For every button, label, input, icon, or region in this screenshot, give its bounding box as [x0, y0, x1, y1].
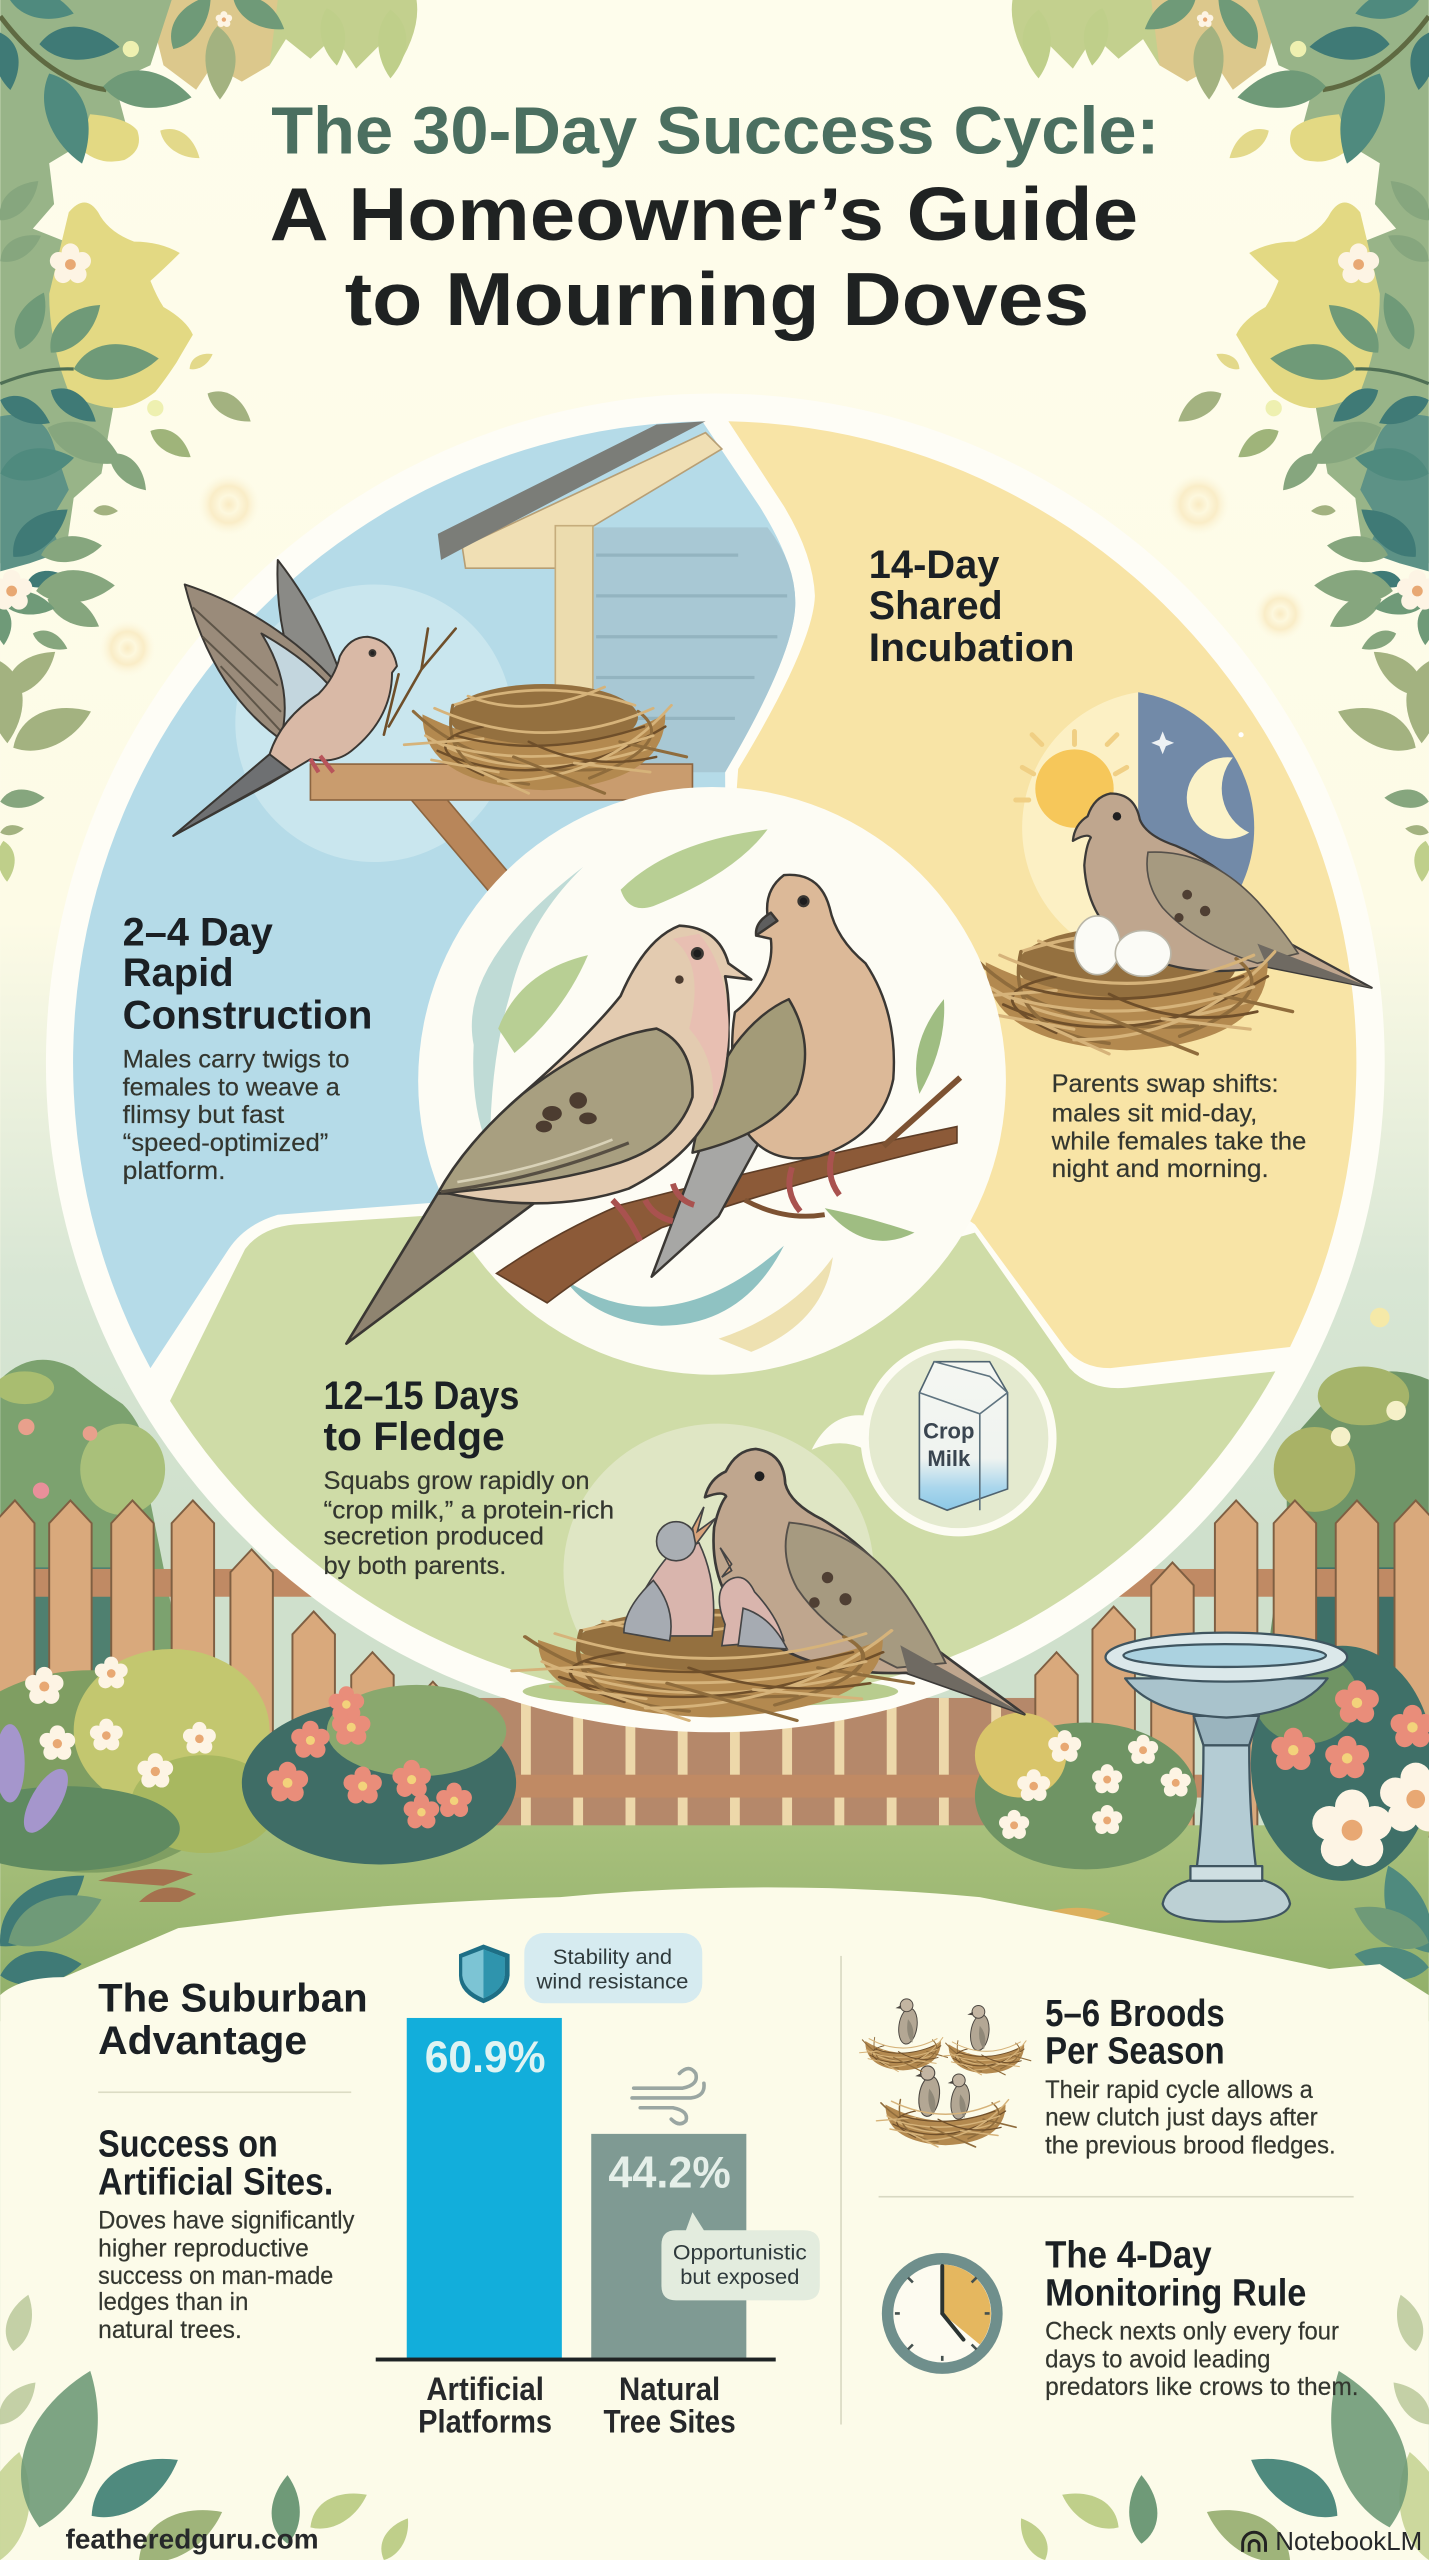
callout: opportunistic: but exposed [680, 2266, 799, 2289]
section: suburban advantage text: success on man-made [98, 2262, 333, 2290]
chick [624, 1507, 787, 1649]
panel: rapid construction [73, 421, 795, 1368]
feeding scene [512, 1424, 1056, 1720]
body text: platform. [123, 1157, 226, 1185]
panel: shared incubation: Incubation [869, 626, 1074, 670]
bar: artificial platforms [407, 2018, 562, 2359]
section: suburban advantage text: Doves have significantly [98, 2207, 355, 2235]
panel: days to fledge [170, 1211, 1275, 1720]
axis labels: Artificial [426, 2370, 544, 2407]
body text: Parents swap shifts: [1052, 1070, 1279, 1098]
crop milk callout: Crop [923, 1418, 974, 1443]
body text: females to weave a [123, 1074, 341, 1102]
bushes [0, 1646, 1429, 1990]
foreground plants [0, 1856, 97, 1961]
body text: Squabs grow rapidly on [323, 1467, 590, 1495]
stat: broods per season: 5–6 Broods [1045, 1992, 1225, 2034]
title: A Homeowner’s Guide [270, 172, 1138, 256]
flying dove [173, 560, 397, 836]
stat: broods per season: Per Season [1045, 2030, 1225, 2072]
white ring of cycle diagram [46, 393, 1385, 1732]
incubating dove on nest [965, 793, 1372, 1054]
body text: “speed-optimized” [123, 1129, 328, 1157]
panel: rapid construction: Rapid [123, 951, 234, 995]
stat: monitoring rule: predators like crows to them. [1045, 2373, 1359, 2401]
bar: natural tree sites: 44.2% [608, 2149, 731, 2198]
title [270, 93, 1159, 341]
body text [123, 1046, 350, 1185]
garden scene [0, 1308, 1429, 2021]
body text [1051, 1070, 1306, 1183]
stat: broods per season [860, 1992, 1336, 2159]
bar chart [376, 1933, 820, 2440]
body text: “crop milk,” a protein-rich [323, 1496, 614, 1524]
crop milk callout: Milk [927, 1446, 971, 1471]
lawn [0, 1825, 1429, 2021]
footer: NotebookLM mark: NotebookLM [1275, 2526, 1422, 2556]
central medallion [346, 787, 1006, 1375]
foliage: top left [0, 0, 417, 882]
stat: monitoring rule [882, 2234, 1359, 2401]
axis labels: Tree Sites [603, 2403, 736, 2440]
nest [404, 684, 687, 793]
bar: natural tree sites [591, 2134, 746, 2359]
footer: website: featheredguru.com [66, 2524, 319, 2555]
body text: Males carry twigs to [123, 1046, 350, 1074]
panel: days to fledge: to Fledge [323, 1415, 505, 1459]
foliage: top right [1012, 0, 1429, 882]
front dove [346, 926, 751, 1344]
title: The 30-Day Success Cycle: [271, 93, 1159, 168]
stat: broods per season: the previous brood fledges. [1045, 2131, 1336, 2159]
section: suburban advantage text: Advantage [98, 2019, 307, 2063]
bar: artificial platforms: 60.9% [425, 2033, 546, 2082]
heading: 14-Day [869, 543, 1000, 587]
body text: by both parents. [323, 1552, 506, 1580]
section: suburban advantage text: higher reproductive [98, 2234, 309, 2262]
stat: broods per season: new clutch just days after [1045, 2104, 1318, 2132]
body text [323, 1467, 614, 1580]
illustration: porch ledge and dove [173, 421, 795, 895]
callout: stability [524, 1933, 702, 2003]
stat: broods per season: Their rapid cycle allows a [1045, 2076, 1314, 2104]
bottom panel background [0, 1887, 1429, 2560]
day and night circle [1016, 692, 1254, 963]
icon: wind [632, 2069, 704, 2124]
title: to Mourning Doves [345, 257, 1089, 341]
stat: monitoring rule: The 4-Day [1045, 2234, 1212, 2276]
section: suburban advantage text: Success on [98, 2123, 278, 2165]
fence [0, 1500, 1429, 1837]
icon: shield [459, 1944, 510, 2003]
body text: males sit mid-day, [1052, 1100, 1257, 1128]
panel: shared incubation [719, 421, 1372, 1368]
section: suburban advantage text: The Suburban [98, 1976, 368, 2020]
panel: shared incubation: Shared [869, 584, 1003, 628]
foliage: bottom right [1014, 2291, 1429, 2560]
body text: night and morning. [1052, 1155, 1269, 1183]
icon: clock [882, 2253, 1003, 2374]
body text: flimsy but fast [123, 1101, 284, 1129]
decorative swirls [472, 829, 944, 1352]
birdbath [1106, 1633, 1347, 1922]
axis labels [418, 2370, 736, 2440]
icon: three nests [860, 1999, 1031, 2147]
body text: while females take the [1051, 1127, 1306, 1155]
stat: monitoring rule: Check nexts only every four [1045, 2318, 1339, 2346]
callout: stability: Stability and [553, 1946, 672, 1969]
heading: 12–15 Days [323, 1374, 519, 1418]
faint background flowers [100, 473, 1306, 2516]
callout: opportunistic: Opportunistic [673, 2242, 807, 2265]
axis labels: Platforms [418, 2403, 552, 2440]
section: suburban advantage text: ledges than in [98, 2288, 248, 2316]
heading: 2–4 Day [123, 910, 274, 954]
panel: rapid construction: Construction [123, 994, 372, 1038]
crop milk callout [812, 1340, 1057, 1536]
axis labels: Natural [619, 2370, 720, 2407]
body text: secretion produced [323, 1522, 544, 1550]
branch [497, 1078, 960, 1303]
stat: monitoring rule: days to avoid leading [1045, 2345, 1270, 2373]
callout: stability: wind resistance [536, 1971, 688, 1994]
section: suburban advantage text: Artificial Sites. [98, 2160, 333, 2202]
stat: monitoring rule: Monitoring Rule [1045, 2271, 1306, 2313]
section: suburban advantage text [98, 1976, 368, 2344]
foliage: bottom left [0, 2291, 415, 2560]
callout: opportunistic [661, 2212, 820, 2300]
rear dove [652, 875, 894, 1277]
section: suburban advantage text: natural trees. [98, 2316, 242, 2344]
